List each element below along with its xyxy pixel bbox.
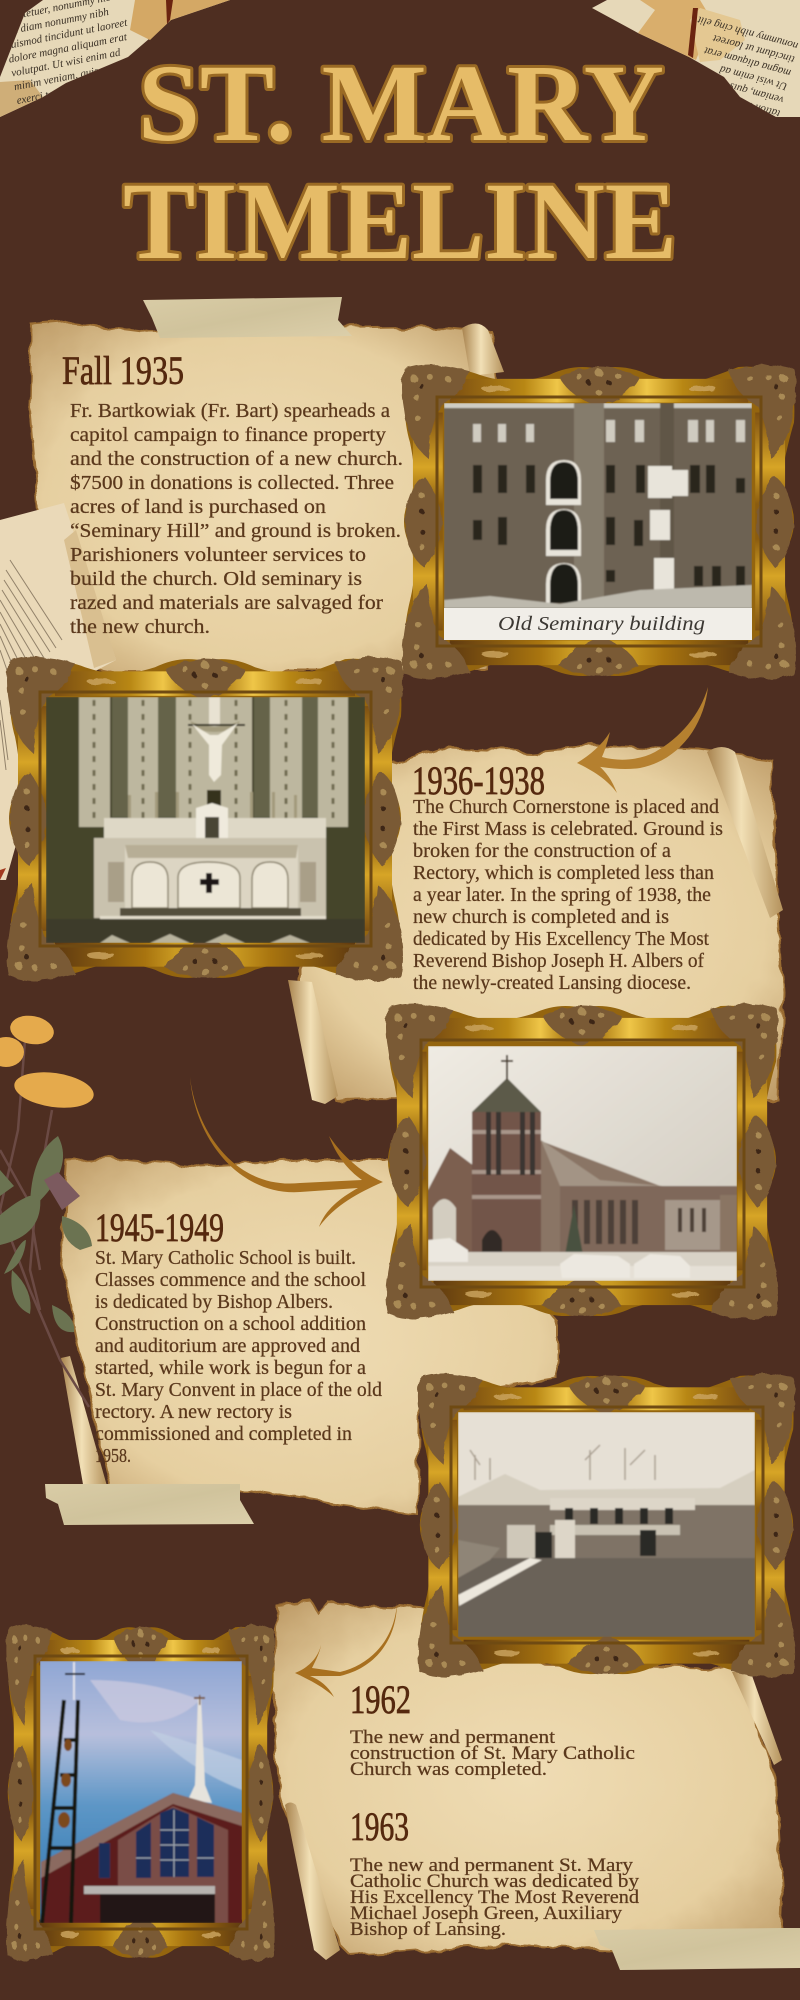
Fall 1935 text [62, 348, 403, 638]
torn newspaper top left [0, 0, 230, 117]
panel: parchment 1945-1949 [60, 1158, 556, 1515]
title: TIMELINE [123, 160, 677, 282]
body text: 1963: His Excellency The Most Reverend [350, 1887, 640, 1908]
body text: 1936-1938: the First Mass is celebrated. Ground is [413, 818, 723, 840]
body text: Fall 1935: acres of land is purchased on [70, 496, 326, 518]
body text: 1945-1949: St. Mary Catholic School is built. [95, 1247, 356, 1269]
torn newspaper top right: tincidunt ut laoreet [711, 32, 796, 65]
body text: 1936-1938: Reverend Bishop Joseph H. Albers of [413, 950, 704, 972]
panel: parchment 1936-1938 [300, 746, 782, 1100]
tape: bottom [594, 1928, 800, 1970]
body text: Fall 1935: Parishioners volunteer services to [70, 544, 366, 566]
caption band [444, 608, 752, 640]
body text: 1936-1938: new church is completed and is [413, 906, 669, 928]
leaves [0, 1136, 92, 1332]
body text: 1936-1938: Rectory, which is completed less than [413, 862, 714, 884]
open book page [0, 503, 116, 880]
photo: altar and crucifix [46, 697, 365, 943]
body text: 1945-1949: Construction on a school addition [95, 1313, 366, 1335]
frame: old seminary photo [402, 364, 796, 679]
body text: 1962 [350, 1727, 635, 1780]
body text: 1936-1938: a year later. In the spring of 1938, the [413, 884, 711, 906]
frame: church exterior photo [386, 1003, 778, 1319]
frame: modern church photo [6, 1625, 275, 1960]
panel: parchment 1962-1963 [273, 1600, 782, 1955]
body text: 1963: Michael Joseph Green, Auxiliary [350, 1903, 623, 1924]
body text: 1963 [350, 1855, 640, 1940]
flowers [0, 1012, 96, 1407]
body text: 1945-1949: started, while work is begun for a [95, 1357, 366, 1379]
body text: 1936-1938: The Church Cornerstone is placed and [413, 796, 719, 818]
arrow: to 1962 photo [295, 1602, 397, 1697]
torn newspaper top right: nonummy nibh cing elit [695, 13, 799, 52]
flower heads [0, 1012, 96, 1112]
body text: Fall 1935: “Seminary Hill” and ground is broken. [70, 520, 401, 542]
title [123, 42, 677, 282]
body text: 1962: Church was completed. [350, 1759, 547, 1780]
body text: 1963: The new and permanent St. Mary [350, 1855, 634, 1876]
scroll: right, fourth parchment [732, 1670, 782, 1765]
body text: 1963: Bishop of Lansing. [350, 1919, 506, 1940]
frame: rectory photo [418, 1373, 795, 1677]
body text: Fall 1935: $7500 in donations is collected. Three [70, 472, 394, 494]
title: ST. MARY [138, 42, 664, 164]
body text: 1936-1938: the newly-created Lansing diocese. [413, 972, 691, 994]
scroll: first parchment [462, 323, 504, 376]
scroll: left, third parchment [61, 1356, 107, 1490]
torn newspaper top left: exerci tation ullamc [16, 78, 104, 107]
heading: Fall 1935: Fall 1935 [62, 348, 184, 393]
body text: 1936-1938 [413, 796, 723, 994]
body text: 1945-1949: rectory. A new rectory is [95, 1401, 292, 1423]
torn newspaper top left: minim veniam, quis nostr [13, 60, 125, 93]
photo: St. Mary church [428, 1046, 737, 1281]
panel: parchment Fall 1935 [30, 322, 500, 672]
arrow: to 1945-1949 photo [190, 1077, 383, 1227]
frame: altar photo [7, 656, 403, 981]
body text: Fall 1935 [70, 400, 403, 638]
body text: 1945-1949: Classes commence and the school [95, 1269, 366, 1291]
scroll: right, second parchment [707, 747, 783, 918]
torn newspaper top left: sed diam nonummy nibh [2, 6, 110, 38]
photo: rectory [458, 1412, 755, 1637]
heading: 1945-1949: 1945-1949 [95, 1205, 224, 1250]
body text: Fall 1935: capitol campaign to finance property [70, 424, 386, 446]
torn newspaper top right: veniam, quis nostr [703, 73, 785, 106]
body text: 1936-1938: dedicated by His Excellency The Most [413, 928, 709, 950]
body text: 1945-1949: St. Mary Convent in place of the old [95, 1379, 382, 1401]
tape: middle [45, 1484, 254, 1525]
torn newspaper top left: volutpat. Ut wisi enim ad [10, 46, 122, 79]
torn newspaper top right: magna aliquam erat [702, 44, 792, 79]
torn newspaper top left: euismod tincidunt ut laoreet [5, 17, 129, 52]
body text: 1962: The new and permanent [350, 1727, 556, 1748]
body text: 1962: construction of St. Mary Catholic [350, 1743, 635, 1764]
photo: new church with bell tower [40, 1661, 242, 1923]
body text: Fall 1935: build the church. Old seminary is [70, 568, 362, 590]
torn newspaper top right: tation ullamc lobortis [686, 83, 781, 120]
torn newspaper top right: Ut wisi enim ad [718, 63, 789, 92]
body text: 1936-1938: broken for the construction of a [413, 840, 671, 862]
body text: 1945-1949: commissioned and completed in [95, 1423, 352, 1445]
body text: Fall 1935: razed and materials are salvaged for [70, 592, 383, 614]
body text: 1945-1949: is dedicated by Bishop Albers. [95, 1291, 333, 1313]
body text: 1945-1949: and auditorium are approved and [95, 1335, 360, 1357]
body text: Fall 1935: Fr. Bartkowiak (Fr. Bart) spearheads a [70, 400, 390, 422]
photo: old seminary building [444, 403, 752, 640]
arrow: to 1936-1938 [577, 687, 708, 793]
body text: 1963: Catholic Church was dedicated by [350, 1871, 640, 1892]
heading: 1936-1938: 1936-1938 [412, 758, 545, 803]
body text: Fall 1935: the new church. [70, 616, 210, 638]
scroll: left, fourth parchment [285, 1802, 340, 1960]
heading: 1963: 1963 [350, 1804, 409, 1849]
scroll: left, second parchment [288, 980, 338, 1104]
body text: 1945-1949 [95, 1247, 382, 1467]
body text: 1945-1949: 1958. [95, 1445, 131, 1467]
caption: old seminary building: Old Seminary building [498, 613, 705, 635]
torn newspaper top right [592, 0, 800, 120]
tape: top [143, 297, 352, 338]
body text: Fall 1935: and the construction of a new church. [70, 448, 403, 470]
heading: 1962: 1962 [350, 1677, 411, 1722]
torn newspaper top left: dolore magna aliquam erat [8, 31, 129, 66]
